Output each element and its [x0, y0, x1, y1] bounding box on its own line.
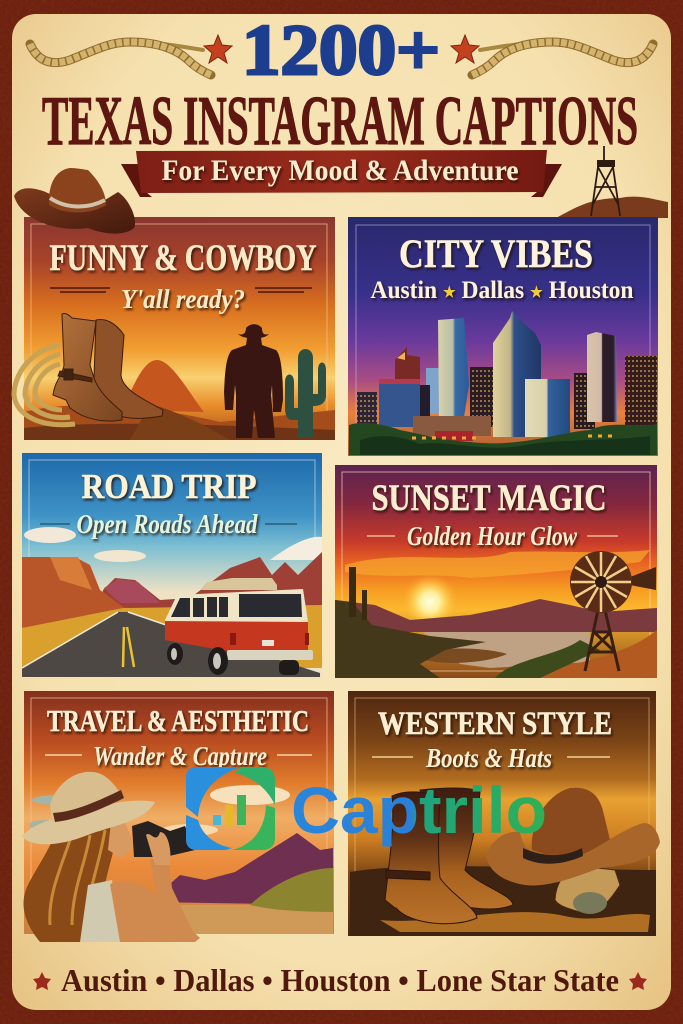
icon: cactus	[285, 349, 326, 438]
icon: spur boot	[555, 866, 620, 914]
icon: windmill	[570, 551, 656, 671]
icon: cowboy hat on header	[14, 168, 135, 234]
water	[423, 632, 590, 668]
subtitle: For Every Mood & Adventure	[162, 154, 518, 187]
heading: WESTERN STYLE	[378, 706, 612, 742]
tagline: Open Roads Ahead	[76, 509, 258, 539]
footer strip	[33, 962, 647, 998]
panel: travel and aesthetic	[22, 691, 334, 942]
hand	[146, 832, 171, 865]
tagline: Wander & Capture	[93, 741, 267, 771]
arm and shoulder	[110, 882, 200, 942]
heading: SUNSET MAGIC	[372, 478, 606, 519]
right hill	[513, 630, 657, 678]
mountains	[150, 833, 333, 905]
left rope	[30, 42, 211, 75]
heading: TRAVEL & AESTHETIC	[47, 703, 309, 738]
far canyon range	[100, 552, 322, 612]
tagline: Golden Hour Glow	[407, 521, 578, 551]
icon: cowboy boots	[53, 313, 163, 421]
city list: Houston	[543, 277, 634, 304]
tagline: Y'all ready?	[121, 284, 245, 314]
camera	[132, 821, 195, 857]
city list: Dallas	[456, 277, 530, 304]
heading: CITY VIBES	[399, 231, 593, 276]
header	[30, 10, 668, 218]
icon: oil derrick and hill	[556, 146, 668, 218]
city list: ★	[530, 285, 543, 301]
icon: cacti	[349, 567, 367, 620]
road	[150, 905, 333, 934]
panel: city vibes	[348, 217, 658, 456]
icon: boots	[385, 788, 513, 924]
panel: western style	[348, 691, 660, 936]
footer text: Austin • Dallas • Houston • Lone Star State	[61, 962, 619, 998]
islands	[420, 648, 507, 663]
right rope	[472, 42, 653, 75]
city list: Austin	[370, 277, 441, 304]
left star	[204, 35, 232, 63]
left scrub	[335, 600, 486, 678]
heading: FUNNY & COWBOY	[50, 238, 317, 279]
panel: sunset magic	[335, 465, 657, 678]
left mesa	[22, 557, 130, 628]
right star	[629, 972, 647, 990]
left star	[33, 972, 51, 990]
logo watermark: Captrilo	[186, 767, 547, 850]
skyline	[349, 311, 657, 455]
panel: funny and cowboy	[14, 217, 335, 440]
bushes	[250, 868, 333, 912]
icon: cowboy hat	[486, 788, 660, 885]
icon: cowboy silhouette	[224, 324, 283, 438]
icon: lasso	[14, 345, 75, 425]
icon: red van	[165, 578, 313, 675]
panel: road trip	[22, 453, 322, 678]
face	[108, 812, 134, 858]
subtitle ribbon	[121, 150, 562, 197]
city list: ★	[443, 285, 456, 301]
title number: 1200+	[242, 10, 440, 90]
hat	[22, 801, 155, 844]
ground and road	[22, 605, 322, 668]
right star	[451, 35, 479, 63]
logo wordmark: Captrilo	[291, 773, 547, 847]
hair	[24, 812, 118, 942]
logo mark	[186, 767, 275, 850]
tagline: Boots & Hats	[425, 743, 552, 773]
traveler with camera	[22, 772, 200, 942]
heading: ROAD TRIP	[82, 467, 256, 506]
top	[80, 880, 120, 942]
distant mountains	[335, 599, 657, 632]
